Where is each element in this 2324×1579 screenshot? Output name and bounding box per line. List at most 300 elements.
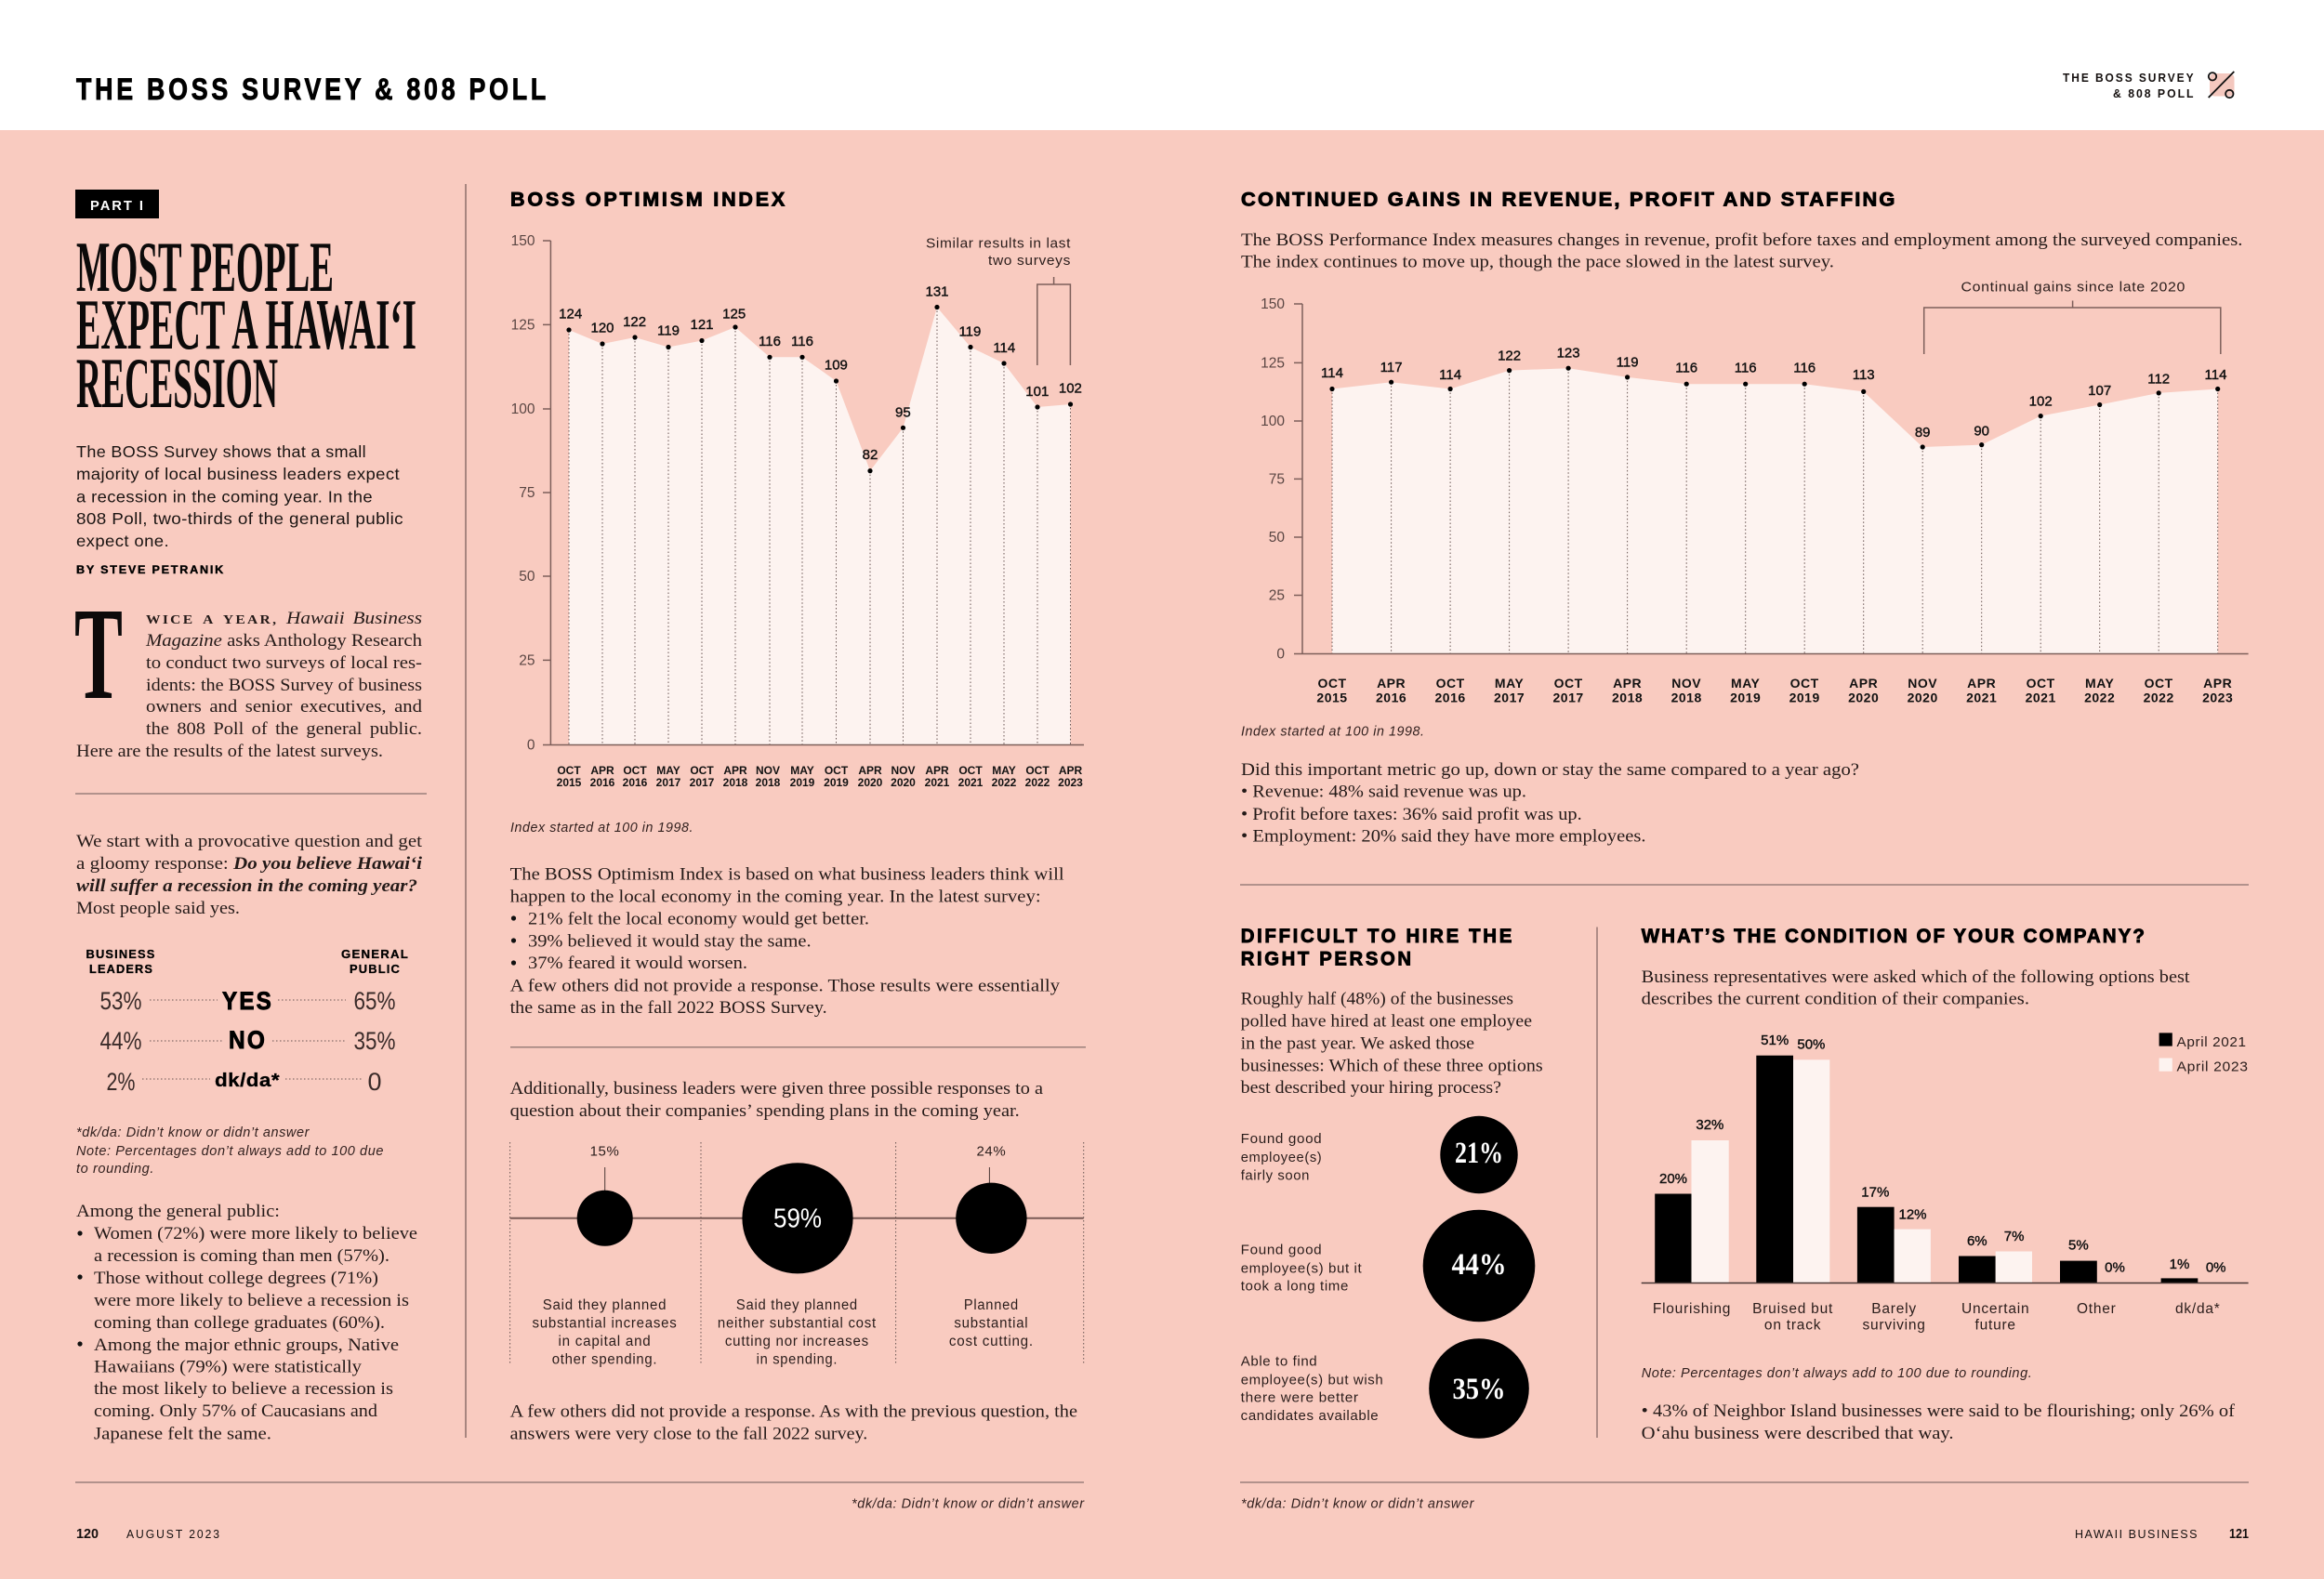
option: better candidates: employee(s) but wish [1241,1372,1383,1388]
row: yes: 53% [100,987,141,1015]
bars: bruised but on track [1752,1033,1833,1333]
x axis labels: APR [590,764,614,777]
bars: flourishing [1653,1117,1731,1317]
table: yes no comparison [86,947,409,1096]
y axis labels [1261,296,1285,662]
folio right [2075,1526,2249,1542]
data value labels: 109 [825,358,848,374]
column heading: general public: GENERAL [341,947,409,961]
option: fairly soon: 21% [1455,1137,1503,1170]
metric list: Did this important metric go up, down or stay the same compared to a year ago? [1241,761,1859,780]
bars: uncertain future: 7% [2004,1229,2024,1244]
caption: cost cutting: cost cutting. [949,1334,1034,1349]
hiring intro: polled have hired at least one employee [1241,1013,1532,1032]
row: no: 44% [100,1027,141,1055]
performance index intro: The index continues to move up, though the pace slowed in the latest survey. [1241,254,1834,272]
legend: April 2021 [2177,1034,2247,1050]
callout: similar results [926,235,1071,365]
closing text [510,1403,1077,1444]
option: long time [1241,1210,1535,1322]
caption: neither: neither substantial cost [718,1315,877,1331]
x axis labels: OCT [1025,764,1050,777]
option: fairly soon: Found good [1241,1131,1322,1147]
bars: barely surviving: 17% [1861,1184,1889,1200]
table notes: *dk/da: Didn’t know or didn’t answer [76,1125,310,1140]
option: long time: 44% [1452,1248,1506,1282]
data value labels: 122 [623,314,646,330]
column heading: general public [341,947,409,976]
x axis labels: NOV [1671,676,1701,691]
chart note: Index started at 100 in 1998. [1241,725,1425,740]
hiring intro: best described your hiring process? [1241,1079,1501,1098]
option: fairly soon: employee(s) [1241,1150,1322,1165]
caption: cost cutting: Planned [964,1297,1019,1313]
option: fairly soon: fairly soon [1241,1167,1310,1183]
x axis labels: 2020 [1908,690,1938,704]
intro text [76,442,403,550]
caption: increases: Said they planned [543,1297,667,1313]
callout: continual gains [1924,279,2221,354]
bubble: 24 percent: 24% [976,1144,1006,1160]
callout: similar results: Similar results in last [926,235,1071,251]
heading: BOSS OPTIMISM INDEX [510,190,787,210]
x axis labels: 2018 [1612,690,1643,704]
bars: bruised but on track: on track [1764,1318,1821,1333]
opening paragraph: idents: the BOSS Survey of business [146,677,422,695]
article headline: MOST PEOPLE [76,227,334,307]
row: dk/da: 2% [106,1068,136,1096]
caption: cost cutting [949,1297,1034,1349]
bars: barely surviving: surviving [1863,1318,1926,1333]
y axis labels: 0 [527,738,535,753]
question text: We start with a provocative question and get [76,833,423,851]
y axis labels: 50 [1269,530,1285,546]
bubble: 59 percent: 59% [773,1204,822,1234]
x axis labels [1316,676,2233,704]
panel: left article column [74,190,427,1444]
opening paragraph: owners and senior executives, and [146,698,423,717]
bars: dk/da [2161,1257,2226,1317]
x axis labels: 2019 [790,776,815,789]
condition intro [1642,968,2191,1009]
option: better candidates [1241,1338,1529,1439]
y axis labels: 25 [1269,587,1285,604]
bars: flourishing: 20% [1659,1171,1687,1187]
data value labels: 124 [559,306,582,322]
general public findings list: Among the major ethnic groups, Native [94,1336,399,1355]
data value labels: 116 [1793,361,1816,376]
caption: increases: substantial increases [532,1315,677,1331]
x axis labels: OCT [958,764,983,777]
article headline: EXPECT A HAWAI‘I [76,284,416,364]
data value labels: 113 [1853,367,1875,383]
y axis labels [511,233,535,753]
data value labels: 90 [1974,423,1989,439]
caption: neither: cutting nor increases [725,1334,869,1349]
optimism index text: 39% believed it would stay the same. [528,933,812,952]
x axis labels: OCT [690,764,714,777]
data value labels: 114 [2205,367,2226,383]
callout: continual gains: Continual gains since late 2020 [1961,279,2185,295]
x axis labels: 2015 [1316,690,1348,704]
hiring intro [1241,991,1543,1098]
x axis labels: 2020 [891,776,916,789]
x axis labels: 2016 [590,776,615,789]
row: yes: 65% [353,987,396,1015]
option: fairly soon [1241,1116,1518,1193]
x axis labels: MAY [2085,676,2115,691]
question text [76,833,423,918]
x axis labels: OCT [623,764,647,777]
callout: similar results: two surveys [988,253,1071,269]
y axis labels: 75 [519,485,535,501]
bars: other: Other [2077,1301,2117,1317]
neighbor island finding: • 43% of Neighbor Island businesses were said to be flourishing; only 26% of [1642,1402,2236,1421]
column heading: business leaders: BUSINESS [86,947,156,961]
option: better candidates: 35% [1452,1373,1506,1406]
x axis labels: APR [723,764,747,777]
option: better candidates: Able to find [1241,1353,1317,1370]
condition intro: Business representatives were asked which of the following options best [1642,968,2191,987]
x axis labels: MAY [992,764,1016,777]
general public findings list: Hawaiians (79%) were statistically [94,1359,363,1377]
x axis labels: OCT [825,764,849,777]
bars: other: 5% [2068,1238,2089,1254]
y axis labels: 100 [511,401,535,417]
bars: dk/da: dk/da* [2175,1301,2221,1317]
heading: DIFFICULT TO HIRE THE [1241,926,1514,947]
x axis labels: OCT [1790,676,1819,691]
x axis labels: 2022 [992,776,1017,789]
condition intro: describes the current condition of their companies. [1642,991,2029,1009]
table notes: to rounding. [76,1162,154,1177]
row: no: 35% [353,1027,396,1055]
x axis labels: 2018 [1671,690,1702,704]
row: dk/da: 0 [367,1068,382,1096]
bubble: 15 percent [577,1144,633,1246]
x axis labels: 2021 [2026,690,2056,704]
bar chart: company condition [1642,1033,2249,1333]
article headline: RECESSION [76,343,278,423]
data value labels: 121 [690,317,714,333]
option: long time: employee(s) but it [1241,1260,1363,1276]
panel: difficult to hire [1241,926,1543,1439]
folio right: HAWAII BUSINESS [2075,1528,2199,1541]
row: yes: YES [222,987,273,1015]
data value labels: 114 [1439,367,1461,383]
general public findings list: Those without college degrees (71%) [94,1270,378,1288]
x axis labels: NOV [891,764,916,777]
spending plans intro: question about their companies’ spending plans in the coming year. [510,1102,1020,1121]
question text: a gloomy response: Do you believe Hawai‘i [76,855,423,874]
bars: bruised but on track: 51% [1761,1033,1789,1048]
chart note: Note: Percentages don’t always add to 100 due to rounding. [1642,1366,2032,1381]
data points [1329,366,2220,450]
x axis labels: MAY [656,764,680,777]
data value labels: 123 [1557,346,1580,362]
optimism index text: the same as in the fall 2022 BOSS Survey. [510,999,827,1018]
bars: uncertain future: Uncertain [1961,1301,2029,1317]
data value labels: 116 [759,334,781,349]
panel: boss optimism index [510,190,1086,1444]
bars: flourishing: 32% [1696,1117,1723,1133]
heading: CONTINUED GAINS IN REVENUE, PROFIT AND STAFFING [1241,190,1897,211]
x axis labels: 2017 [1553,690,1584,704]
x axis labels: APR [2203,676,2232,691]
bars: uncertain future: 6% [1967,1233,1987,1249]
performance index intro: The BOSS Performance Index measures changes in revenue, profit before taxes and employment among the surveyed companies. [1241,231,2242,250]
caption: increases: other spending. [552,1351,657,1367]
data value labels: 117 [1380,360,1403,375]
x axis labels: OCT [1317,676,1347,691]
intro text: a recession in the coming year. In the [76,487,373,506]
x axis labels: 2022 [2144,690,2174,704]
spending plans intro: Additionally, business leaders were given three possible responses to a [510,1080,1043,1099]
data value labels: 95 [895,405,911,420]
x axis labels: OCT [1436,676,1465,691]
data value labels: 82 [863,447,878,463]
x axis labels: 2019 [824,776,849,789]
general public findings list [76,1203,417,1444]
y axis labels: 50 [519,569,535,585]
data value labels: 114 [1321,365,1343,381]
optimism index text: The BOSS Optimism Index is based on what business leaders think will [510,865,1064,884]
legend [2159,1033,2249,1075]
metric list: • Profit before taxes: 36% said profit was up. [1241,806,1582,824]
hiring intro: in the past year. We asked those [1241,1034,1474,1053]
x axis labels: NOV [1908,676,1937,691]
question text: Most people said yes. [76,900,240,918]
bars: flourishing: Flourishing [1653,1301,1731,1317]
data value labels: 119 [1617,355,1639,371]
x axis labels: 2016 [623,776,648,789]
data value labels: 102 [1059,381,1082,397]
x axis labels: 2016 [1435,690,1466,704]
header section tag: THE BOSS SURVEY [2063,72,2196,85]
y axis labels: 75 [1269,471,1285,487]
x axis labels: 2021 [1966,690,1997,704]
general public findings list: Among the general public: [76,1203,280,1221]
data value labels: 107 [2088,383,2111,399]
x axis labels: APR [1849,676,1878,691]
data value labels [559,283,1082,463]
optimism index text: 37% feared it would worsen. [528,954,747,973]
bars: dk/da: 1% [2170,1257,2189,1272]
intro text: expect one. [76,532,169,550]
part label [75,190,159,218]
bars: bruised but on track: 50% [1797,1036,1825,1052]
x axis labels: 2017 [690,776,715,789]
x axis labels: NOV [756,764,780,777]
bars: other [2060,1238,2125,1317]
line chart: performance index [1261,279,2249,704]
opening paragraph [76,610,423,761]
x axis labels: 2017 [1494,690,1525,704]
bars: bruised but on track: Bruised but [1752,1301,1833,1317]
y axis labels: 0 [1276,647,1285,662]
data value labels: 120 [590,320,614,336]
x axis labels: APR [1967,676,1996,691]
closing text: answers were very close to the fall 2022 survey. [510,1426,867,1444]
y axis labels: 125 [511,317,535,333]
header section tag [2063,72,2196,100]
x axis labels: 2023 [2202,690,2233,704]
y axis labels: 150 [1261,296,1285,312]
opening paragraph: Magazine asks Anthology Research [145,632,422,651]
x axis labels: OCT [2027,676,2055,691]
column heading: general public: PUBLIC [350,962,401,976]
metric list [1241,761,1859,847]
intro text: The BOSS Survey shows that a small [76,442,366,461]
closing text: A few others did not provide a response. As with the previous question, the [510,1403,1077,1422]
bars: uncertain future: future [1975,1318,2016,1333]
row: dk/da [106,1068,382,1096]
opening paragraph: WICE A YEAR, Hawaii Business [146,610,422,628]
data value labels: 119 [958,324,981,340]
x axis labels: 2022 [2084,690,2115,704]
part label: PART I [90,198,145,214]
bars: barely surviving: Barely [1871,1301,1917,1317]
x axis labels: 2023 [1058,776,1083,789]
row: dk/da: dk/da* [215,1071,280,1091]
x axis labels [557,764,1083,789]
general public findings list: Women (72%) were more likely to believe [94,1225,417,1243]
bubble chart: spending plans [510,1142,1084,1367]
caption: cost cutting: substantial [954,1315,1028,1331]
x axis labels: OCT [1554,676,1583,691]
folio left [76,1526,221,1542]
data value labels: 122 [1498,348,1521,364]
general public findings list: coming than college graduates (60%). [94,1314,385,1333]
x axis labels: APR [1613,676,1642,691]
x axis labels: MAY [1731,676,1761,691]
neighbor island finding [1642,1402,2236,1443]
x axis labels: MAY [1495,676,1524,691]
optimism index text: happen to the local economy in the coming year. In the latest survey: [510,888,1041,907]
neighbor island finding: O‘ahu business were described that way. [1642,1425,1954,1443]
general public findings list: a recession is coming than men (57%). [94,1247,390,1266]
panel: continued gains [1241,190,2249,847]
general public findings list: coming. Only 57% of Caucasians and [94,1402,378,1421]
caption: neither: Said they planned [736,1297,858,1313]
general public findings list: the most likely to believe a recession is [94,1380,393,1399]
general public findings list: were more likely to believe a recession is [94,1292,409,1310]
x axis labels: 2020 [1848,690,1879,704]
footnote left page: *dk/da: Didn’t know or didn’t answer [852,1497,1085,1512]
heading [1241,926,1514,969]
bars: barely surviving: 12% [1898,1207,1927,1223]
column heading: business leaders: LEADERS [89,962,153,976]
x axis labels: APR [1377,676,1406,691]
data value labels: 131 [925,283,949,299]
bubble: 24 percent [956,1144,1027,1254]
question text: will suffer a recession in the coming year? [76,877,417,896]
line chart: boss optimism index [511,233,1084,789]
byline: BY STEVE PETRANIK [76,563,225,576]
data value labels: 116 [1735,361,1757,376]
y axis labels: 125 [1261,355,1285,371]
hiring intro: businesses: Which of these three options [1241,1057,1543,1075]
heading: RIGHT PERSON [1241,948,1414,969]
data value labels: 112 [2147,372,2170,388]
x axis labels: APR [925,764,949,777]
x axis labels: 2019 [1789,690,1820,704]
data value labels: 114 [993,340,1015,356]
heading: WHAT’S THE CONDITION OF YOUR COMPANY? [1642,926,2146,947]
spending plans intro [510,1080,1043,1121]
caption: increases: in capital and [558,1334,651,1349]
bars: dk/da: 0% [2206,1260,2226,1275]
optimism index text [510,865,1064,1018]
x axis labels: 2021 [958,776,984,789]
option: long time: Found good [1241,1243,1322,1258]
hiring intro: Roughly half (48%) of the businesses [1241,991,1513,1009]
data value labels: 102 [2029,393,2053,409]
icon: percent sign [2209,72,2235,98]
option: long time: took a long time [1241,1279,1349,1295]
bars: other: 0% [2105,1260,2125,1275]
x axis labels: 2020 [858,776,883,789]
metric list: • Revenue: 48% said revenue was up. [1241,783,1526,802]
intro text: 808 Poll, two-thirds of the general public [76,509,403,528]
x axis labels: 2016 [1376,690,1406,704]
x axis labels: MAY [790,764,814,777]
x axis labels: 2021 [925,776,950,789]
x axis labels: 2019 [1730,690,1761,704]
opening paragraph: Here are the results of the latest surveys. [76,743,383,761]
y axis labels: 150 [511,233,535,249]
x axis labels: 2017 [656,776,681,789]
metric list: • Employment: 20% said they have more employees. [1241,828,1645,847]
x axis labels: 2015 [557,776,582,789]
bars: uncertain future [1959,1229,2032,1333]
bubble: 59 percent [742,1163,853,1273]
data value labels: 101 [1025,384,1049,400]
optimism index text: A few others did not provide a response. Those results were essentially [510,977,1061,995]
panel: condition of your company [1642,926,2249,1443]
x axis labels: APR [858,764,882,777]
folio right: 121 [2229,1526,2249,1542]
caption: increases [532,1297,677,1367]
data value labels: 125 [722,306,746,322]
x axis labels: 2022 [1025,776,1050,789]
option: better candidates: candidates available [1241,1408,1379,1424]
table notes: Note: Percentages don’t always add to 100 due [76,1144,384,1159]
caption: neither: in spending. [757,1351,838,1367]
row: no [100,1026,396,1055]
optimism index text: 21% felt the local economy would get better. [528,911,869,929]
folio left: 120 [76,1526,99,1542]
data value labels: 119 [657,323,680,339]
x axis labels: OCT [557,764,581,777]
row: yes [100,987,396,1015]
data value labels [1321,346,2226,441]
drop cap: T [74,580,123,727]
option: better candidates: there were better [1241,1390,1359,1406]
data value labels: 89 [1915,425,1931,441]
x axis labels: OCT [2145,676,2173,691]
intro text: majority of local business leaders expect [76,465,400,483]
page header title: THE BOSS SURVEY & 808 POLL [76,72,549,106]
x axis labels: APR [1059,764,1082,777]
x axis labels: 2018 [756,776,781,789]
data points [566,305,1073,473]
legend: April 2023 [2177,1059,2249,1075]
y axis labels: 100 [1261,414,1285,429]
data value labels: 116 [791,334,813,349]
bars: barely surviving [1857,1184,1931,1333]
chart note: Index started at 100 in 1998. [510,821,693,836]
